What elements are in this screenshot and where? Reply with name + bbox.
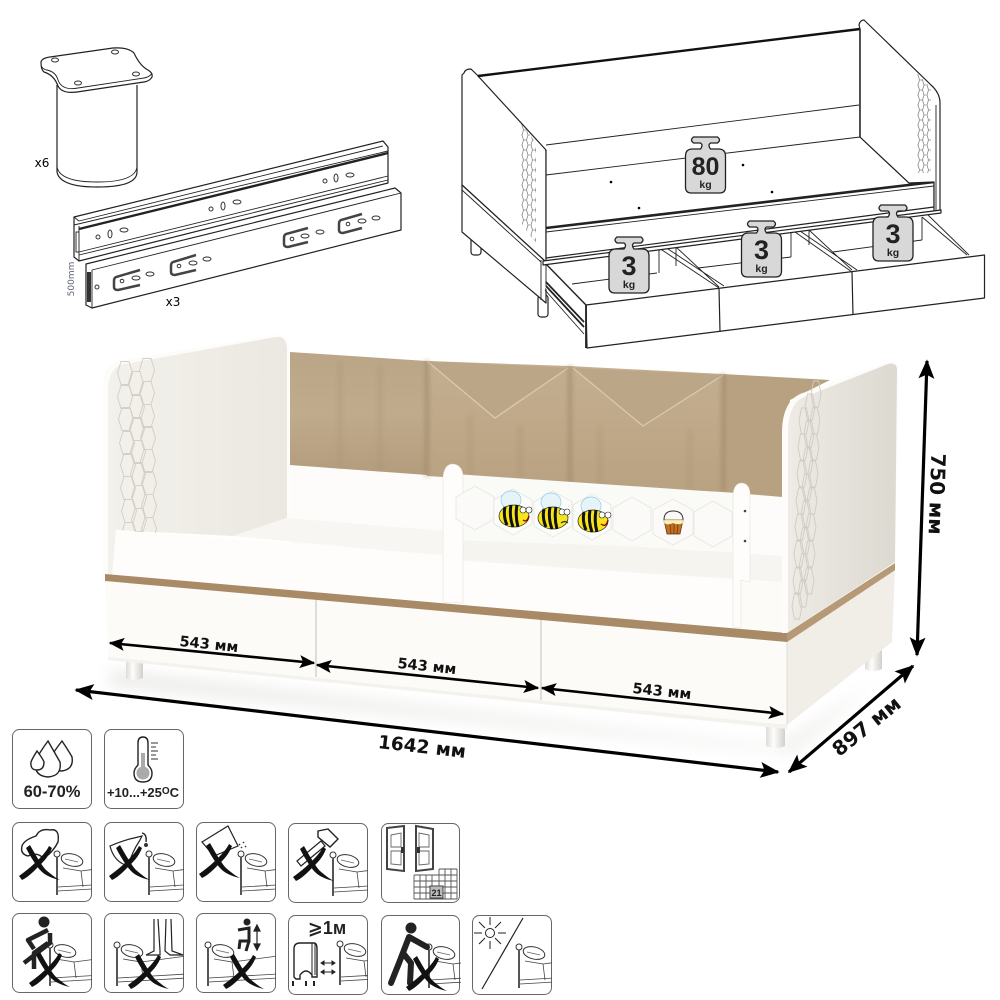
dimension: 543 mm left xyxy=(110,634,314,663)
left side panel xyxy=(103,335,289,575)
dimension: 543 mm right xyxy=(542,681,783,714)
icon: no liquids xyxy=(104,822,219,902)
product render: bed xyxy=(103,335,899,752)
dimension: 543 mm right: 543 мм xyxy=(632,681,692,703)
icon: no jumping xyxy=(196,914,278,992)
dimension: 1642 mm xyxy=(76,690,778,772)
safety fence xyxy=(455,474,733,550)
icon: no hammer xyxy=(288,824,403,902)
icon: no jumping onto bed xyxy=(12,914,120,992)
icon: ventilate room 21 days: 21 xyxy=(431,888,442,898)
back wall and curtain xyxy=(290,460,785,640)
honeycomb left xyxy=(118,358,156,546)
weight: 80 kg: kg xyxy=(699,179,712,191)
dimension: 897 mm: 897 мм xyxy=(827,691,906,761)
icon: avoid direct sunlight xyxy=(472,916,589,994)
dots xyxy=(610,181,612,183)
weight: 80 kg xyxy=(686,137,726,193)
weight: 3 kg left: 3 xyxy=(621,251,637,281)
weight: 80 kg: 80 xyxy=(692,153,719,181)
weight: 3 kg left: kg xyxy=(623,279,635,291)
dimension: 897 mm xyxy=(789,666,913,772)
weight: 3 kg middle xyxy=(742,221,782,277)
icon: humidity: 60-70% xyxy=(24,783,81,801)
honeycomb right xyxy=(792,381,821,619)
fence hexagons xyxy=(456,486,732,547)
dimension: 543 mm left: 543 мм xyxy=(179,634,239,656)
dimension: 543 mm middle: 543 мм xyxy=(397,656,457,678)
label: 500mm: 500mm xyxy=(67,262,77,296)
dimension: 750 mm: 750 мм xyxy=(924,453,950,535)
bee 2 xyxy=(538,493,570,529)
hardware: drawer slide lower xyxy=(86,188,401,308)
legs xyxy=(126,652,143,680)
icon: temperature: O xyxy=(162,786,170,797)
weight: 3 kg right: kg xyxy=(887,247,899,259)
mattress surface xyxy=(233,518,445,556)
bee 1 xyxy=(499,491,532,527)
honey bucket xyxy=(664,511,683,534)
label: x3: x3 xyxy=(166,295,180,309)
drawers xyxy=(105,578,787,725)
weight: 3 kg middle: kg xyxy=(755,263,768,275)
label: x6: x6 xyxy=(35,156,49,170)
icon: humidity xyxy=(12,730,92,808)
dimension: 750 mm xyxy=(917,361,950,655)
icon: no standing on bed xyxy=(104,914,187,992)
weight: 3 kg right xyxy=(873,205,913,261)
line drawing: bed with load limits xyxy=(462,20,984,348)
right side panel xyxy=(782,361,899,633)
front rail xyxy=(112,530,443,602)
weight: 3 kg right: 3 xyxy=(885,219,901,249)
icon: ventilate room 21 days xyxy=(382,824,460,902)
wood strip xyxy=(105,562,895,642)
icon: temperature: +10...+25 xyxy=(107,785,162,800)
dimension: 543 mm middle xyxy=(317,656,538,688)
weight: 3 kg middle: 3 xyxy=(754,235,769,265)
hardware: furniture leg xyxy=(41,48,152,187)
icon: no heavy load xyxy=(12,822,127,902)
bee 3 xyxy=(578,497,611,532)
dimension: 1642 mm: 1642 мм xyxy=(377,732,467,763)
icon: keep away from heaters 1 m xyxy=(288,916,410,994)
icon: no sharp impact xyxy=(196,822,311,902)
open drawers xyxy=(545,212,984,348)
icon: temperature xyxy=(104,730,184,808)
hardware: drawer slide upper xyxy=(74,141,388,261)
icon: no moving bed by force xyxy=(382,916,499,994)
weight: 3 kg left xyxy=(609,237,649,293)
icon: keep away from heaters 1 m: ⩾1м xyxy=(308,918,346,938)
icon: temperature: C xyxy=(170,785,180,800)
